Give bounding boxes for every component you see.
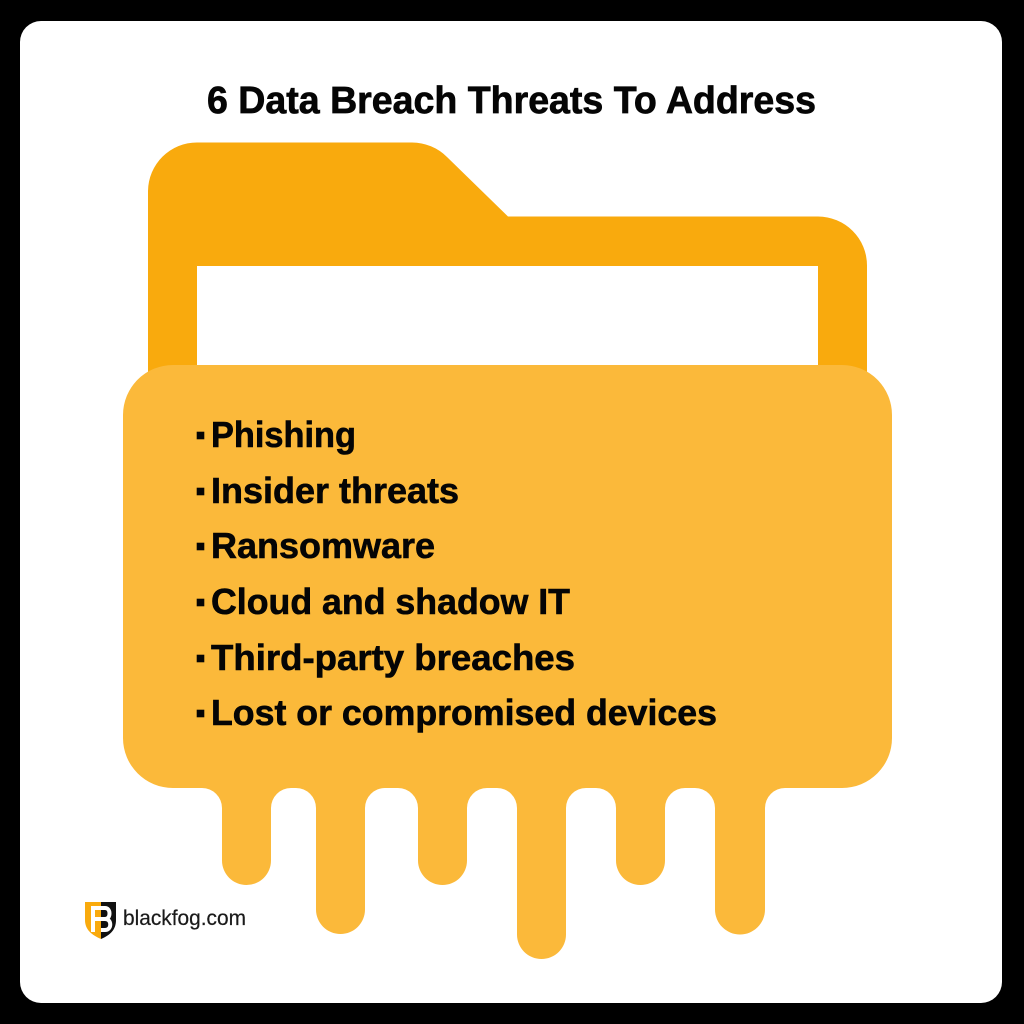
logo wordmark: blackfog.com (123, 907, 246, 930)
list item: Cloud and shadow IT: Cloud and shadow IT (211, 581, 570, 622)
panel: folder front with drips (123, 365, 892, 959)
list item: Phishing: Phishing (211, 414, 356, 455)
list item: Ransomware: Ransomware (211, 525, 435, 566)
threat list (197, 414, 717, 733)
icon: folder back (148, 142, 867, 400)
icon: shield (85, 902, 116, 939)
list item: Lost or compromised devices: Lost or compromised devices (211, 692, 717, 733)
list item: Third-party breaches: Third-party breaches (211, 637, 575, 678)
list item: Insider threats: Insider threats (211, 470, 459, 511)
logo: BlackFog (85, 902, 246, 939)
title: 6 Data Breach Threats To Address (207, 80, 816, 122)
